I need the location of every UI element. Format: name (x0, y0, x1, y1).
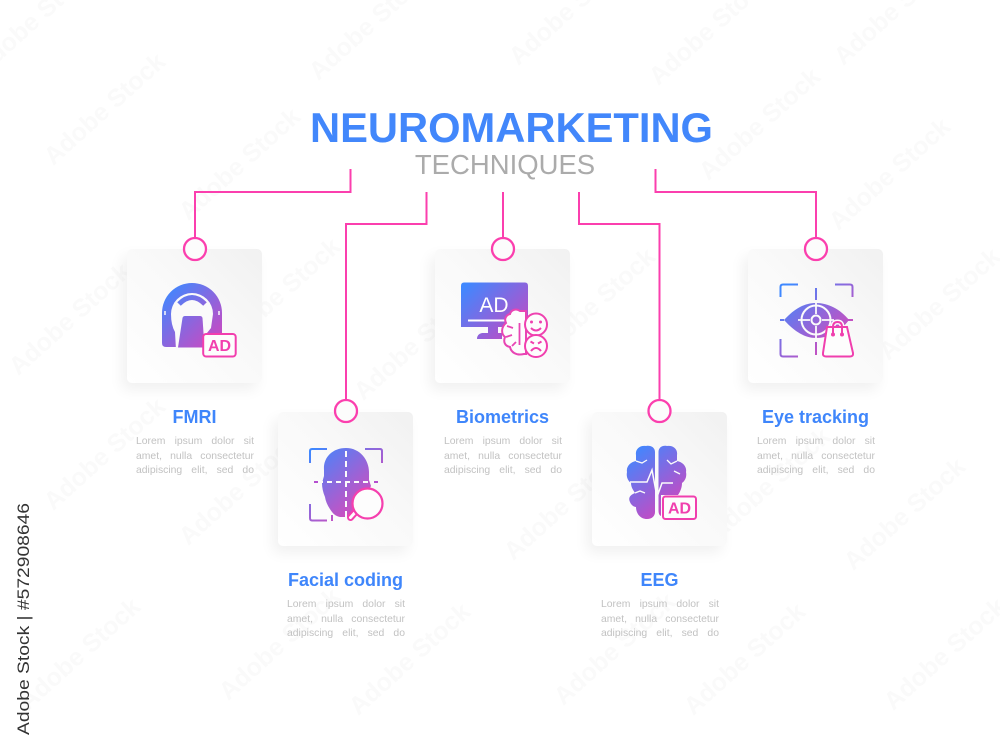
watermark pattern: Adobe Stock (694, 62, 826, 186)
card (435, 249, 570, 383)
text block: amet, nulla consectetur (444, 451, 562, 462)
text block: Lorem ipsum dolor sit (601, 599, 719, 610)
text block: amet, nulla consectetur (287, 614, 405, 625)
icon: monitor with brain and emotion faces (461, 282, 548, 358)
icon: brain with pulse and AD badge: AD (668, 500, 691, 518)
icon: brain with pulse and AD badge (626, 446, 697, 520)
panel: Facial coding (274, 412, 413, 639)
watermark pattern: Adobe Stock (824, 112, 956, 236)
text block: adipiscing elit, sed do (287, 628, 405, 639)
text block (287, 599, 405, 639)
text block: Lorem ipsum dolor sit (757, 436, 875, 447)
text block (136, 436, 254, 476)
text block (757, 436, 875, 476)
text block (601, 599, 719, 639)
watermark pattern: Adobe Stock (4, 257, 136, 381)
panel: EEG (588, 412, 727, 639)
card (127, 249, 262, 383)
text block: adipiscing elit, sed do (136, 465, 254, 476)
watermark pattern: Adobe Stock (344, 597, 476, 721)
panel: FMRI (124, 249, 262, 476)
text block: adipiscing elit, sed do (601, 628, 719, 639)
watermark pattern: Adobe Stock (679, 597, 811, 721)
text block: adipiscing elit, sed do (444, 465, 562, 476)
text block: amet, nulla consectetur (601, 614, 719, 625)
text block (444, 436, 562, 476)
icon: face scan with magnifier (309, 448, 384, 522)
card (278, 412, 413, 546)
panel: Eye tracking (744, 249, 883, 476)
heading: FMRI (172, 407, 216, 427)
watermark pattern: Adobe Stock (499, 442, 631, 566)
watermark pattern: Adobe Stock (14, 592, 146, 716)
watermark pattern: Adobe Stock (214, 582, 346, 706)
text block: amet, nulla consectetur (136, 451, 254, 462)
heading: Eye tracking (762, 407, 869, 427)
text block: amet, nulla consectetur (757, 451, 875, 462)
text block: Lorem ipsum dolor sit (287, 599, 405, 610)
watermark pattern: Adobe Stock (704, 422, 836, 546)
watermark pattern: Adobe Stock (549, 587, 681, 711)
panel: Biometrics (432, 249, 570, 476)
text block: Lorem ipsum dolor sit (136, 436, 254, 447)
icon: MRI scanner with AD badge (162, 283, 237, 358)
heading: Biometrics (456, 407, 549, 427)
card (592, 412, 727, 546)
subtitle: TECHNIQUES (415, 149, 595, 180)
text block: Lorem ipsum dolor sit (444, 436, 562, 447)
watermark pattern: Adobe Stock (529, 242, 661, 366)
heading: EEG (640, 570, 678, 590)
watermark pattern: Adobe Stock (174, 102, 306, 226)
icon: monitor with brain and emotion faces: AD (479, 294, 509, 317)
watermark pattern: Adobe Stock (39, 392, 171, 516)
watermark pattern: Adobe Stock (174, 427, 306, 551)
stock id text: Adobe Stock | #572908646 (14, 503, 33, 735)
watermark pattern: Adobe Stock (839, 452, 971, 576)
icon: eye target with shopping bag (780, 284, 854, 358)
watermark pattern: Adobe Stock (349, 282, 481, 406)
text block: adipiscing elit, sed do (757, 465, 875, 476)
card (748, 249, 883, 383)
watermark pattern: Adobe Stock (214, 232, 346, 356)
watermark pattern: Adobe Stock (39, 47, 171, 171)
heading: Facial coding (288, 570, 403, 590)
title: NEUROMARKETING (310, 104, 713, 151)
icon: MRI scanner with AD badge: AD (208, 338, 231, 355)
